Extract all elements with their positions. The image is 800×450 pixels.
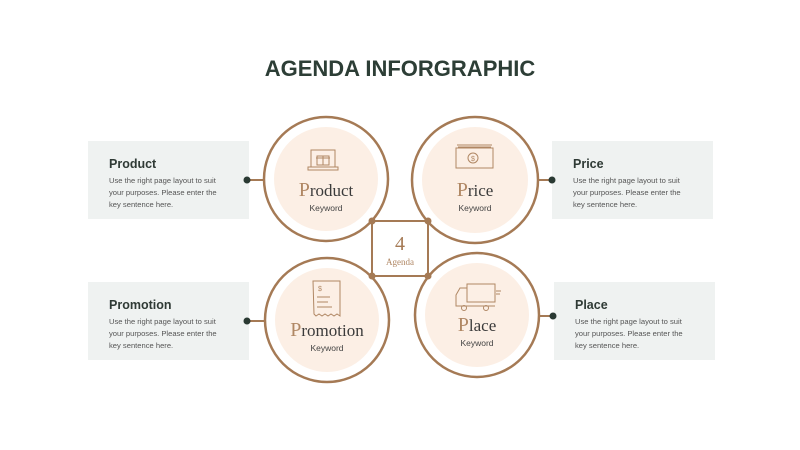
icon: truck [456, 284, 501, 310]
circle: product [264, 117, 388, 241]
circle: product: Product [299, 179, 354, 201]
circle: price: Keyword [458, 203, 492, 213]
panel: price text [552, 141, 713, 219]
icon: money: $ [471, 156, 475, 163]
panel: place text [554, 282, 715, 360]
circle: price: Price [457, 179, 493, 201]
panel: place text: Place [575, 298, 608, 312]
circle: place [415, 253, 539, 377]
circle: promotion: Keyword [310, 343, 344, 353]
panel: promotion text [88, 282, 249, 360]
panel: product text [88, 141, 249, 219]
panel: product text: Product [109, 157, 156, 171]
circle: price [412, 117, 538, 243]
panel: promotion text: Promotion [109, 298, 172, 312]
title: AGENDA INFORGRAPHIC [265, 56, 535, 81]
panel: place text: Use the right page layout to suit your purposes. Please enter the key sentence here. [575, 317, 683, 350]
center square: 4 agenda: 4 [395, 233, 405, 255]
panel: price text: Use the right page layout to suit your purposes. Please enter the key sentence here. [573, 176, 681, 209]
panel: price text: Price [573, 157, 604, 171]
circle: product: Keyword [309, 203, 343, 213]
circle: promotion: Promotion [290, 319, 364, 341]
circle: place: Keyword [460, 338, 494, 348]
center square: 4 agenda [368, 218, 432, 280]
circle: promotion [265, 258, 389, 382]
center square: 4 agenda: Agenda [386, 257, 414, 267]
panel: promotion text: Use the right page layout to suit your purposes. Please enter the key sentence here. [109, 317, 217, 350]
panel: product text: Use the right page layout to suit your purposes. Please enter the key sentence here. [109, 176, 217, 209]
icon: receipt: $ [318, 286, 322, 293]
icon: laptop gift [308, 150, 338, 170]
circle: place: Place [458, 314, 496, 336]
